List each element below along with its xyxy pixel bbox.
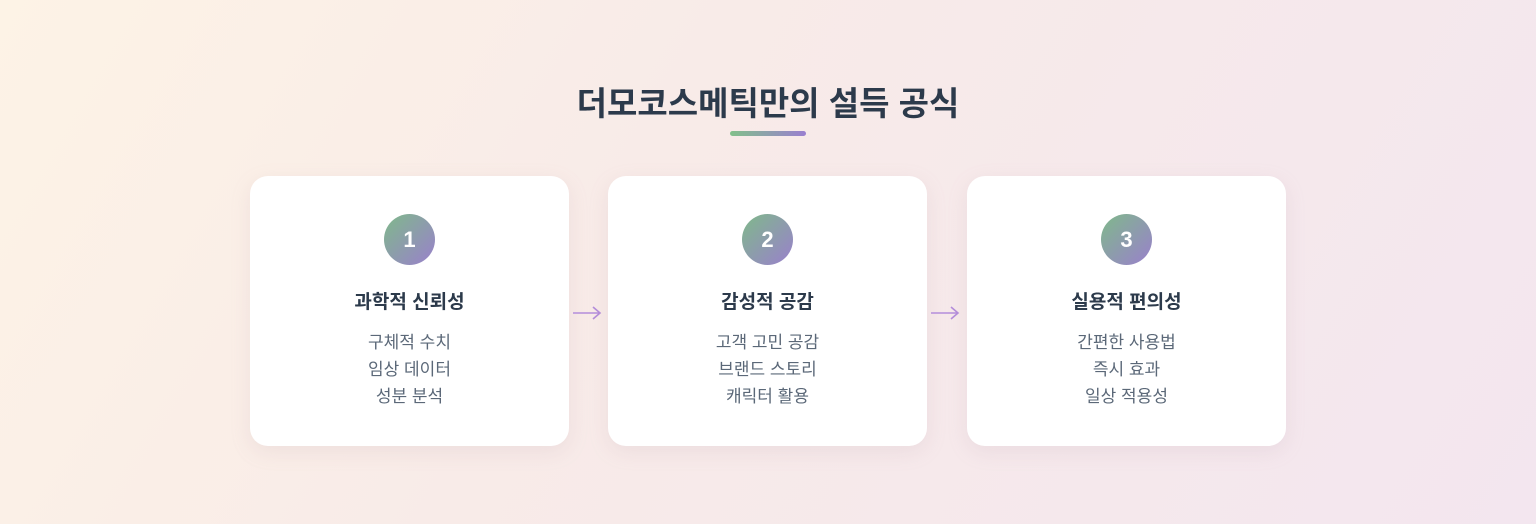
items: 일상 적용성 [1085, 387, 1168, 406]
items: 성분 분석 [376, 387, 443, 406]
badge 2 [742, 214, 793, 265]
arrow [931, 306, 959, 320]
heading: 실용적 편의성 [1071, 292, 1182, 313]
items: 임상 데이터 [368, 360, 451, 379]
items [1077, 333, 1176, 406]
badge 3: 3 [1120, 227, 1133, 252]
items: 캐릭터 활용 [726, 387, 809, 406]
items: 구체적 수치 [368, 333, 451, 352]
heading: 과학적 신뢰성 [354, 292, 465, 313]
items [716, 333, 819, 406]
title: 더모코스메틱만의 설득 공식 [577, 85, 959, 122]
badge 1: 1 [403, 227, 416, 252]
badge 3 [1101, 214, 1152, 265]
items: 고객 고민 공감 [716, 333, 819, 352]
items: 즉시 효과 [1093, 360, 1160, 379]
panel: 감성적 공감 [608, 176, 927, 446]
title underline [730, 131, 806, 136]
items [368, 333, 451, 406]
items: 브랜드 스토리 [718, 360, 817, 379]
badge 2: 2 [761, 227, 774, 252]
arrow [573, 306, 601, 320]
panel: 과학적 신뢰성 [250, 176, 569, 446]
panel: 실용적 편의성 [967, 176, 1286, 446]
heading: 감성적 공감 [721, 292, 814, 313]
items: 간편한 사용법 [1077, 333, 1176, 352]
badge 1 [384, 214, 435, 265]
